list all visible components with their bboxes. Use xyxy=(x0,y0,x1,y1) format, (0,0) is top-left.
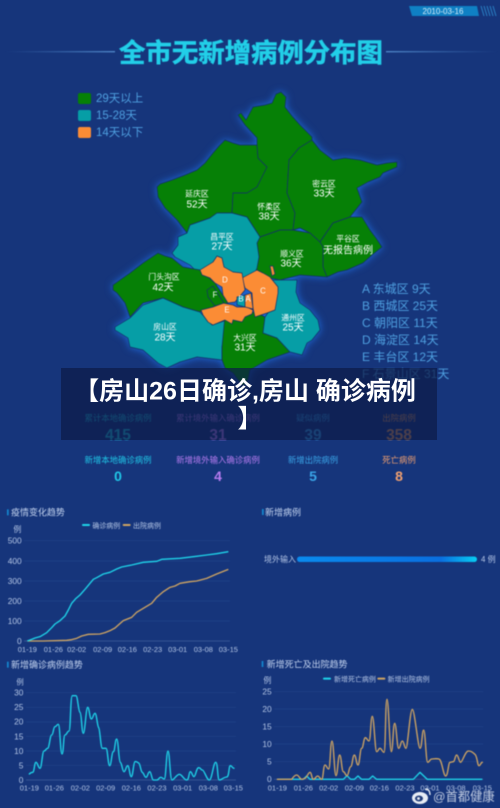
map labels: B xyxy=(238,294,244,304)
map legend: 29天以上 xyxy=(96,92,143,105)
chart: new cases bar: 境外输入 xyxy=(264,554,296,564)
chart: epidemic trend: 500 xyxy=(8,536,22,546)
statistics row: cumulative: 358 xyxy=(386,427,412,444)
chart: epidemic trend: 03-15 xyxy=(219,645,238,654)
district key xyxy=(362,282,449,381)
district: Chaoyang enclave xyxy=(270,266,275,276)
district key: D 海淀区 14天 xyxy=(362,332,439,347)
district key: A 东城区 9天 xyxy=(362,282,431,296)
statistics row: cumulative: 累计境外输入确诊病例 xyxy=(176,413,260,423)
headline banner: 】 xyxy=(237,405,263,433)
chart: epidemic trend: 确诊病例 xyxy=(92,521,120,530)
district: Dongcheng xyxy=(245,293,253,309)
chart: new confirmed trend: 例 xyxy=(16,677,24,686)
map labels: 无报告病例 xyxy=(323,244,373,256)
chart: new deaths and discharges: 01-19 xyxy=(268,783,287,792)
statistics row: cumulative xyxy=(84,413,416,444)
map labels: 延庆区 xyxy=(185,188,209,198)
chart: new confirmed trend: 02-09 xyxy=(96,784,115,793)
district: Huairou xyxy=(232,92,312,237)
statistics row: new: 4 xyxy=(214,468,222,484)
chart: epidemic trend: 疫情变化趋势 xyxy=(11,507,65,518)
chart: new deaths and discharges: 0 xyxy=(267,774,272,784)
map labels: D xyxy=(222,276,228,284)
map labels: 38天 xyxy=(258,212,280,222)
map labels: 怀柔区 xyxy=(257,202,281,212)
district: Shijingshan xyxy=(207,286,224,306)
map labels xyxy=(148,178,373,354)
title: 全市无新增病例分布图 xyxy=(119,38,383,68)
map labels: 大兴区 xyxy=(233,332,257,342)
statistics row: cumulative: 出院病例 xyxy=(382,413,416,423)
map labels: 平谷区 xyxy=(336,234,360,244)
map labels: A xyxy=(245,294,251,304)
chart: new deaths and discharges xyxy=(262,658,492,792)
map labels: 密云区 xyxy=(312,178,336,188)
chart: new deaths and discharges: 15 xyxy=(262,722,272,732)
statistics row: cumulative: 累计本地确诊病例 xyxy=(84,413,152,423)
chart: new deaths and discharges: 02-02 xyxy=(319,783,338,792)
date tag: 2010-03-16 xyxy=(423,7,464,16)
district: Daxing xyxy=(222,312,290,386)
map labels: F xyxy=(213,290,218,300)
district key: C 朝阳区 11天 xyxy=(362,316,438,330)
chart: new deaths and discharges: 20 xyxy=(262,704,272,714)
chart: new deaths and discharges: 25 xyxy=(262,687,272,697)
chart: epidemic trend: 200 xyxy=(8,596,22,606)
district key: B 西城区 25天 xyxy=(362,299,438,313)
chart: epidemic trend: 例 xyxy=(13,524,21,534)
chart: new deaths and discharges: 02-09 xyxy=(345,783,364,792)
map labels: 25天 xyxy=(282,322,304,334)
statistics row: new: 8 xyxy=(395,468,403,484)
map labels: 昌平区 xyxy=(210,232,234,242)
headline banner xyxy=(61,368,437,440)
map labels: 52天 xyxy=(186,200,208,210)
map labels: 门头沟区 xyxy=(148,272,180,282)
chart: new deaths and discharges: 新增出院病例 xyxy=(388,674,430,683)
chart: new deaths and discharges: 例 xyxy=(263,675,271,685)
statistics row: new: 死亡病例 xyxy=(382,455,416,465)
district: Chaoyang xyxy=(242,270,278,317)
chart: epidemic trend: 02-16 xyxy=(118,645,137,654)
map labels: E xyxy=(224,306,230,314)
chart: new deaths and discharges: 10 xyxy=(262,739,272,749)
map labels: 31天 xyxy=(234,342,256,354)
chart: new confirmed trend: 02-23 xyxy=(147,784,167,793)
district: Tongzhou xyxy=(263,280,320,355)
map labels: 33天 xyxy=(313,188,335,200)
chart: epidemic trend: 02-02 xyxy=(67,645,86,654)
chart: new cases bar: 4 例 xyxy=(481,554,496,564)
map labels: 28天 xyxy=(154,332,176,344)
district key: E 丰台区 12天 xyxy=(362,349,438,364)
date tag xyxy=(409,6,496,16)
chart: new cases bar xyxy=(262,506,496,564)
district: Fangshan xyxy=(115,298,227,368)
chart: epidemic trend xyxy=(7,507,238,654)
chart: epidemic trend: 0 xyxy=(17,636,22,646)
chart: epidemic trend: 03-01 xyxy=(168,645,187,654)
district: Mentougou xyxy=(113,253,228,317)
chart: new confirmed trend: 03-01 xyxy=(173,784,192,793)
district key: F 石景山区 31天 xyxy=(362,367,449,381)
chart: new confirmed trend: 03-15 xyxy=(224,784,243,793)
chart: epidemic trend: 03-08 xyxy=(194,645,213,654)
district: Haidian xyxy=(200,256,245,303)
chart: new deaths and discharges: 03-15 xyxy=(473,783,492,792)
map labels: 通州区 xyxy=(281,312,305,322)
map labels: 27天 xyxy=(211,242,233,252)
map legend xyxy=(78,92,143,139)
chart: epidemic trend: 02-23 xyxy=(143,645,162,654)
statistics row: new: 5 xyxy=(309,468,317,484)
statistics row: new xyxy=(84,455,416,484)
chart: epidemic trend: 300 xyxy=(8,576,22,586)
statistics row: cumulative: 39 xyxy=(304,427,322,444)
chart: epidemic trend: 01-26 xyxy=(44,645,63,654)
chart: new confirmed trend: 10 xyxy=(14,746,24,756)
map labels: 36天 xyxy=(280,258,302,270)
chart: new cases bar: 新增病例 xyxy=(265,506,301,518)
map labels: C xyxy=(260,286,266,296)
chart: new deaths and discharges: 新增死亡及出院趋势 xyxy=(267,658,348,669)
statistics row: new: 0 xyxy=(114,468,122,484)
map of Beijing districts xyxy=(113,92,397,386)
chart: new confirmed trend: 30 xyxy=(14,688,24,698)
statistics row: new: 新增本地确诊病例 xyxy=(84,455,152,465)
watermark xyxy=(412,789,495,804)
chart: new confirmed trend: 新增确诊病例趋势 xyxy=(11,659,83,670)
chart: new deaths and discharges: 03-08 xyxy=(446,783,466,792)
chart: new confirmed trend: 02-02 xyxy=(71,784,90,793)
district: Fengtai xyxy=(201,303,253,325)
map legend: 14天以下 xyxy=(96,126,143,139)
map labels: 房山区 xyxy=(153,322,177,332)
statistics row: cumulative: 31 xyxy=(209,427,227,444)
district: Shunyi xyxy=(255,230,327,280)
statistics row: new: 新增境外输入确诊病例 xyxy=(176,455,260,465)
chart: new confirmed trend: 20 xyxy=(14,717,24,727)
chart: new confirmed trend: 01-19 xyxy=(20,784,39,793)
chart: new confirmed trend: 0 xyxy=(19,775,24,785)
chart: new deaths and discharges: 01-26 xyxy=(294,783,313,792)
chart: new deaths and discharges: 03-01 xyxy=(420,783,440,792)
district: Miyun xyxy=(287,140,397,242)
watermark: @首都健康 xyxy=(433,789,495,804)
chart: new confirmed trend: 25 xyxy=(14,702,24,712)
chart: epidemic trend: 02-09 xyxy=(93,645,112,654)
headline banner: 【房山26日确诊,房山 确诊病例 xyxy=(74,378,416,406)
statistics row: new: 新增出院病例 xyxy=(288,455,338,465)
district: Xicheng xyxy=(237,295,245,307)
chart: new confirmed trend: 03-08 xyxy=(199,784,218,793)
chart: new confirmed trend: 5 xyxy=(19,760,24,770)
map labels: 顺义区 xyxy=(280,250,304,258)
district: Pinggu xyxy=(320,217,382,277)
chart: new deaths and discharges: 02-16 xyxy=(370,783,389,792)
chart: epidemic trend: 100 xyxy=(8,616,22,626)
chart: new confirmed trend: 02-16 xyxy=(122,784,141,793)
chart: new confirmed trend: 15 xyxy=(14,731,24,741)
map legend: 15-28天 xyxy=(96,110,137,122)
chart: new deaths and discharges: 02-23 xyxy=(395,783,415,792)
statistics row: cumulative: 疑似病例 xyxy=(296,413,330,423)
chart: epidemic trend: 出院病例 xyxy=(133,521,161,530)
chart: epidemic trend: 01-19 xyxy=(18,645,37,654)
chart: new confirmed trend: 01-26 xyxy=(45,784,64,793)
map labels: 42天 xyxy=(152,282,174,294)
district: Yanqing xyxy=(157,140,267,233)
district: Changping xyxy=(172,213,260,285)
chart: epidemic trend: 400 xyxy=(8,556,22,566)
chart: new deaths and discharges: 5 xyxy=(267,757,272,767)
chart: new confirmed trend xyxy=(7,659,243,793)
chart: new deaths and discharges: 新增死亡病例 xyxy=(334,674,376,683)
statistics row: cumulative: 415 xyxy=(105,427,131,444)
